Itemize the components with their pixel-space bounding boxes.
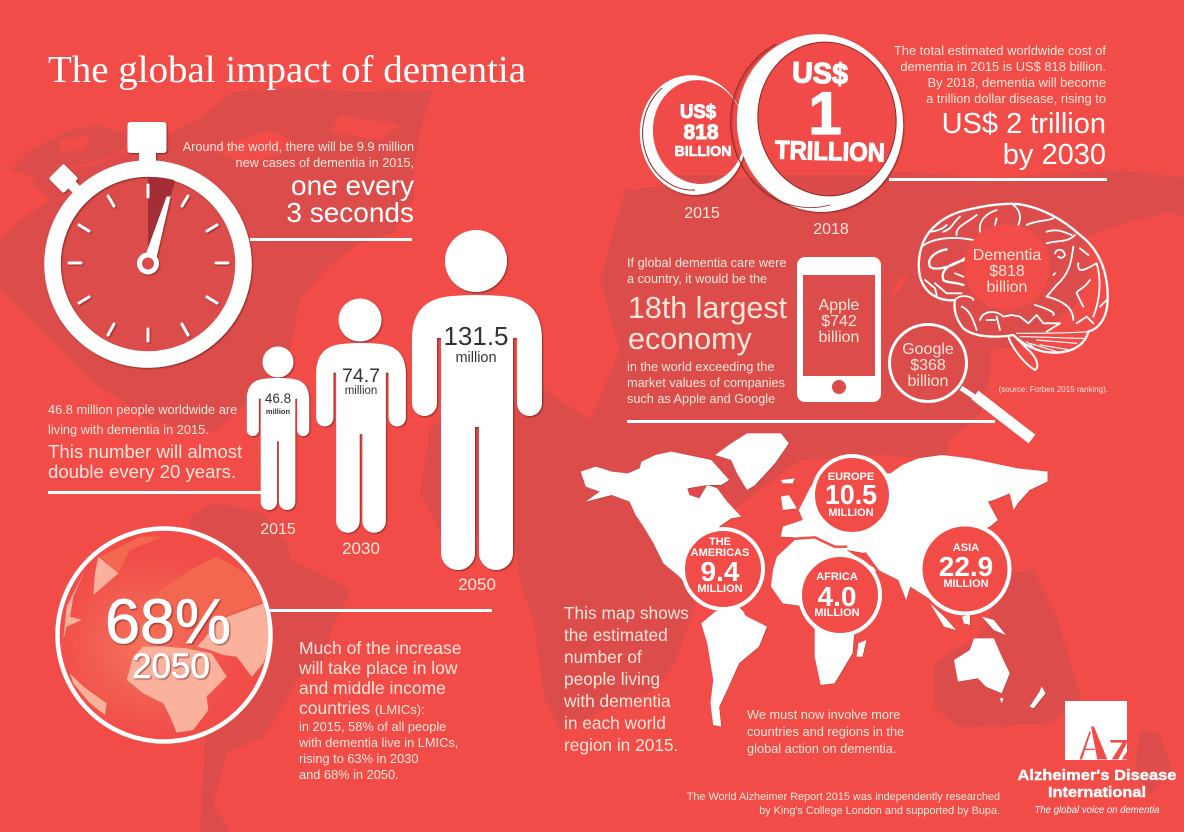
north america (581, 452, 745, 617)
person 2030 (316, 298, 406, 533)
coin 2015: 818 (683, 121, 719, 144)
text: new cases: Around the world, there will be 9.9 million (183, 140, 414, 154)
text: 18th largest economy: economy (628, 322, 753, 356)
brain icon: $818 (989, 263, 1025, 280)
map region: Asia: 22.9 (939, 551, 993, 582)
islands (857, 640, 866, 657)
text: low and middle income countries: rising to 63% in 2030 (299, 751, 419, 766)
text: people living with dementia (48, 402, 243, 482)
map seas (795, 537, 878, 572)
label 2030 figure (342, 365, 380, 558)
text: this map shows: people living (564, 669, 660, 689)
text: total cost: By 2018, dementia will become (928, 75, 1106, 90)
coin 2018: TRILLION (775, 135, 885, 167)
se asia (930, 603, 956, 630)
label 2030 figure: 2030 (342, 539, 380, 558)
brain icon: billion (987, 279, 1027, 296)
text: 18th largest economy: a country, it would be the (627, 272, 767, 286)
text: this map shows: with dementia (563, 691, 671, 711)
map region: Europe: MILLION (828, 507, 874, 519)
logo: Alzheimer's Disease International: The global voice on dementia (1034, 804, 1160, 816)
text: call to action (747, 707, 904, 756)
australia (954, 638, 1010, 693)
phone icon: billion (819, 329, 859, 346)
text: people living with dementia: This number will almost (48, 441, 243, 462)
text: this map shows: the estimated (564, 625, 668, 645)
text: total cost: The total estimated worldwide cost of (894, 43, 1106, 58)
eurasia (781, 455, 1048, 610)
text: call to action: global action on dementia. (747, 741, 896, 756)
text: 18th largest economy (627, 256, 788, 406)
coin 2015 (640, 75, 744, 197)
text: new cases: 3 seconds (286, 197, 414, 228)
globe 68%: 68% (105, 587, 231, 657)
text: new cases: new cases of dementia in 2015, (236, 156, 414, 170)
map region: Africa: AFRICA (816, 571, 858, 583)
map region: the Americas (683, 529, 763, 609)
coin 2015: BILLION (674, 143, 732, 160)
text: low and middle income countries: with dementia live in LMICs, (298, 735, 458, 750)
coin 2018: US$ (791, 57, 849, 91)
footer credit: by King's College London and supported by Bupa. (759, 805, 1000, 817)
coin 2018: 1 (808, 80, 842, 147)
footer credit: The World Alzheimer Report 2015 was independently researched (687, 791, 1000, 803)
label 2050 figure (443, 321, 509, 594)
logo: Alzheimer's Disease International: International (1048, 784, 1146, 801)
magnifying glass: Google (890, 324, 1032, 439)
logo: Alzheimer's Disease International: Alzheimer's Disease (1018, 767, 1176, 784)
phone icon (797, 257, 881, 402)
text: this map shows: This map shows (564, 603, 689, 623)
map region: Asia: ASIA (953, 542, 979, 554)
text: low and middle income countries: and 68% in 2050. (299, 767, 399, 782)
logo: Alzheimer's Disease International (1018, 701, 1176, 816)
map region: Africa: MILLION (814, 607, 860, 619)
label 2050 figure: 131.5 (443, 321, 509, 351)
text: low and middle income countries: and middle income (299, 678, 446, 698)
text: 18th largest economy: If global dementia care were (627, 256, 786, 270)
map region: the Americas: THE (709, 536, 731, 548)
text: new cases (183, 140, 414, 228)
phone icon: $742 (821, 313, 857, 330)
person 2050 (412, 230, 542, 570)
source note: (source: Forbes 2015 ranking). (999, 385, 1108, 394)
text: total cost: a trillion dollar disease, rising to (926, 91, 1106, 106)
text: low and middle income countries: will take place in low (298, 658, 458, 678)
map region: the Americas: AMERICAS (691, 547, 749, 559)
text: low and middle income countries: countries (LMICs): (299, 698, 425, 718)
brain icon (919, 204, 1108, 370)
text: people living with dementia: 46.8 million people worldwide are (48, 402, 237, 417)
crown (128, 122, 166, 153)
map region: Africa: 4.0 (818, 581, 856, 612)
brain icon: Dementia (973, 247, 1041, 264)
coin year labels: 2018 (813, 221, 849, 238)
label 2050 figure: 2050 (458, 575, 496, 594)
map region: the Americas: MILLION (697, 583, 743, 595)
text: total cost: dementia in 2015 is US$ 818 billion. (900, 59, 1106, 74)
text: this map shows: in each world (564, 713, 666, 733)
text: 18th largest economy: market values of companies (627, 376, 785, 390)
text: total cost: by 2030 (1003, 139, 1106, 171)
coin 2015: US$ (680, 102, 716, 123)
text: low and middle income countries: in 2015, 58% of all people (299, 719, 446, 734)
text: this map shows: number of (564, 647, 642, 667)
africa (771, 538, 878, 685)
text: 18th largest economy: 18th largest (628, 291, 788, 325)
greenland (715, 433, 789, 490)
footer credit (687, 791, 1000, 817)
label 2015 figure: 2015 (260, 521, 296, 538)
text: this map shows: region in 2015. (564, 735, 678, 755)
map region: Europe: 10.5 (825, 479, 877, 510)
label 2015 figure (260, 391, 296, 538)
map region: the Americas: 9.4 (701, 556, 740, 587)
text: this map shows (563, 603, 689, 755)
globe 68% (58, 528, 272, 742)
person 2015 (247, 346, 309, 510)
background bright specks (60, 115, 910, 297)
label 2030 figure: million (345, 385, 377, 397)
text: low and middle income countries (298, 638, 461, 782)
map region: Africa (800, 555, 880, 635)
map region: Asia: MILLION (943, 578, 989, 590)
world map (581, 433, 1048, 727)
coin 2018 (730, 34, 905, 214)
text: 18th largest economy: in the world exceeding the (627, 360, 774, 374)
label 2015 figure: million (266, 407, 290, 416)
text: call to action: countries and regions in the (747, 724, 904, 739)
map region: Asia (920, 524, 1010, 614)
map region: Europe: EUROPE (828, 471, 874, 483)
label 2050 figure: million (455, 350, 497, 366)
text: people living with dementia: double every 20 years. (48, 461, 236, 482)
text: 18th largest economy: such as Apple and Google (627, 392, 775, 406)
text: new cases: one every (291, 170, 414, 201)
label 2030 figure: 74.7 (342, 365, 380, 387)
coin year labels: 2015 (684, 205, 720, 222)
text: total cost: US$ 2 trillion (942, 108, 1106, 140)
coin year labels (684, 205, 849, 238)
text: people living with dementia: living with dementia in 2015. (48, 422, 209, 437)
text: call to action: We must now involve more (747, 707, 900, 722)
text: total cost (894, 43, 1106, 171)
text: low and middle income countries: Much of the increase (299, 638, 461, 658)
map region: Europe (813, 456, 891, 534)
south america (701, 607, 767, 727)
magnifying glass: Google: billion (908, 373, 948, 390)
globe 68%: 2050 (132, 647, 210, 686)
magnifying glass: Google: $368 (910, 357, 946, 374)
stopwatch icon (49, 122, 244, 360)
title: The global impact of dementia (48, 49, 526, 91)
phone icon: Apple (819, 297, 860, 314)
magnifying glass: Google: Google (902, 341, 954, 358)
label 2015 figure: 46.8 (265, 391, 291, 406)
